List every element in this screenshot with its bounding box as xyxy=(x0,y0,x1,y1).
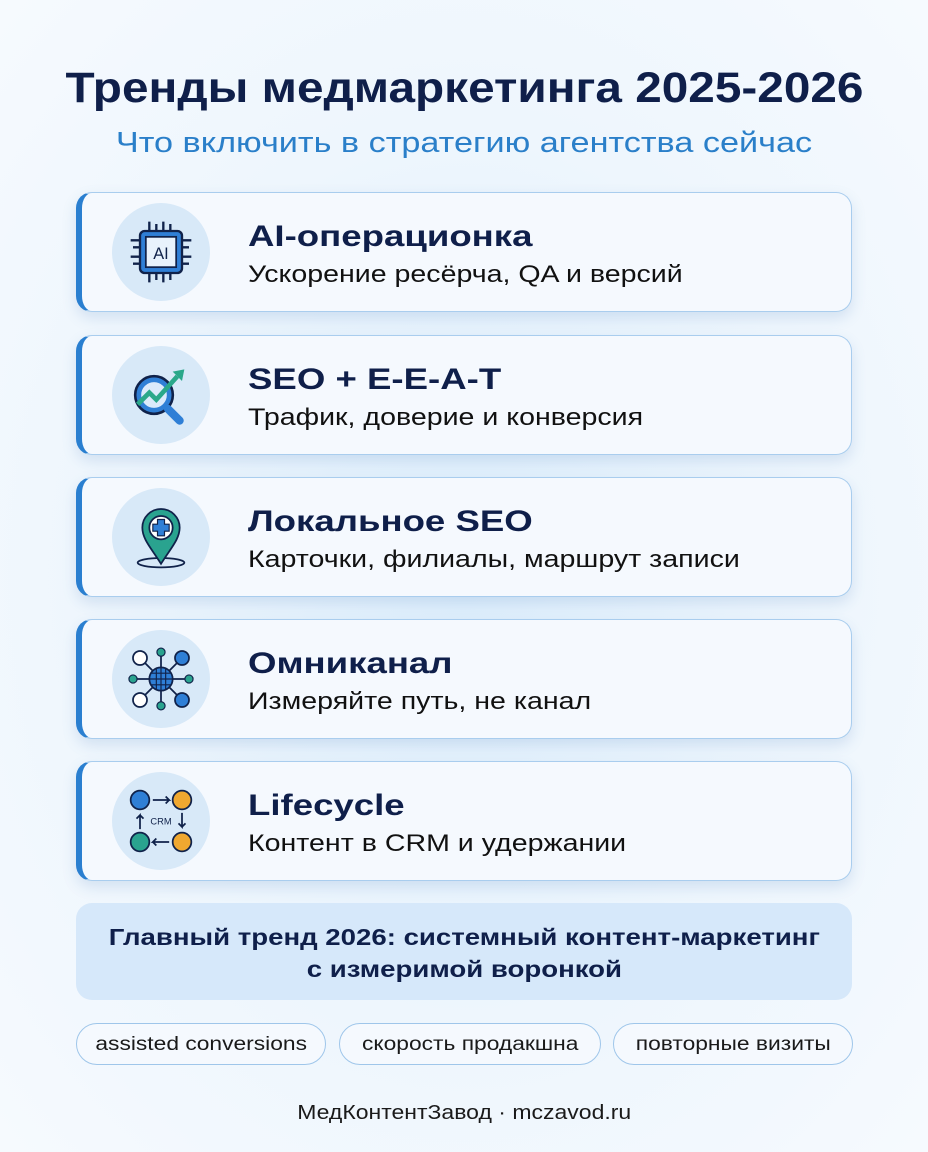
icon: AI chip: AI xyxy=(153,245,169,263)
icon: CRM cycle: CRM xyxy=(150,816,172,826)
text: Ускорение ресёрча, QA и версий xyxy=(248,261,683,288)
pill: speed xyxy=(339,1023,601,1065)
heading: Lifecycle xyxy=(248,789,405,822)
pill: speed: скорость продакшна xyxy=(362,1034,578,1055)
pill: assisted conversions: assisted conversions xyxy=(95,1034,307,1055)
pill: assisted conversions xyxy=(76,1023,326,1065)
callout: main trend xyxy=(76,903,852,1000)
icon: CRM cycle xyxy=(112,772,210,870)
callout: main trend: с измеримой воронкой xyxy=(306,956,622,982)
callout: main trend: Главный тренд 2026: системный контент-маркетинг xyxy=(108,924,820,950)
card: SEO xyxy=(76,335,852,455)
icon: AI chip xyxy=(112,203,210,301)
card: lifecycle xyxy=(76,761,852,881)
heading: SEO + E-E-A-T xyxy=(248,363,501,396)
pill: repeat visits: повторные визиты xyxy=(635,1034,831,1055)
text: Контент в CRM и удержании xyxy=(248,830,626,857)
text: Трафик, доверие и конверсия xyxy=(248,404,643,431)
icon: map pin xyxy=(112,488,210,586)
title: Тренды медмаркетинга 2025-2026 xyxy=(65,64,863,112)
subtitle: Что включить в стратегию агентства сейчас xyxy=(116,127,812,159)
icon: magnifier growth xyxy=(112,346,210,444)
card: omnichannel xyxy=(76,619,852,739)
pill: repeat visits xyxy=(613,1023,853,1065)
text: Измеряйте путь, не канал xyxy=(248,688,591,715)
card: AI xyxy=(76,192,852,312)
footer: МедКонтентЗавод · mczavod.ru xyxy=(297,1102,631,1124)
heading: Омниканал xyxy=(248,647,453,680)
text: Карточки, филиалы, маршрут записи xyxy=(248,546,740,573)
heading: Локальное SEO xyxy=(248,505,533,538)
icon: network globe xyxy=(112,630,210,728)
heading: AI-операционка xyxy=(248,220,532,253)
card: local SEO xyxy=(76,477,852,597)
